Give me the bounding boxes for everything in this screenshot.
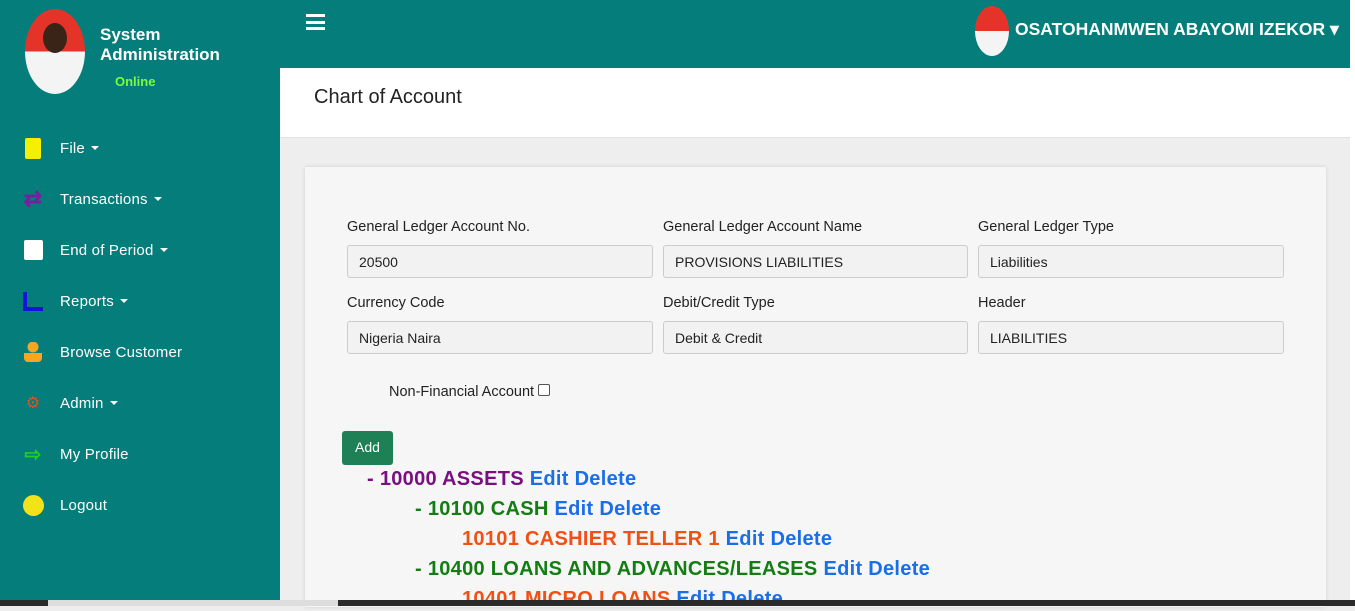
nav: logout: Logout [60, 496, 107, 514]
form card: General Ledger Type [978, 219, 1114, 235]
sidebar title: Administration [100, 45, 220, 64]
nav: browse customer: Browse Customer [60, 344, 182, 360]
page header [280, 68, 1350, 138]
account tree: - 10100 CASH Edit Delete [415, 498, 661, 520]
account tree: 10401 MICRO LOANS Edit Delete [462, 588, 783, 610]
add button: Add [355, 439, 380, 455]
account tree: 10101 CASHIER TELLER 1 Edit Delete [462, 528, 832, 550]
nav: browse customer [24, 342, 182, 362]
user name: OSATOHANMWEN ABAYOMI IZEKOR ▾ [1015, 19, 1339, 39]
form card: Header [978, 295, 1026, 311]
form card: Liabilities [990, 254, 1048, 270]
form card: 20500 [359, 254, 398, 270]
account tree: - 10400 LOANS AND ADVANCES/LEASES Edit Delete [415, 558, 930, 580]
nav: transactions: Transactions [60, 190, 148, 208]
sidebar title: System [100, 25, 160, 44]
nav: my profile: ⇨ [25, 444, 41, 466]
form card: LIABILITIES [990, 330, 1067, 346]
sidebar title [100, 25, 220, 64]
status online: Online [115, 74, 155, 89]
form card: General Ledger Account Name [663, 219, 862, 235]
user avatar [975, 6, 1009, 56]
top bar [280, 0, 1350, 68]
add button [342, 431, 393, 465]
nav: end of period: End of Period [60, 242, 154, 258]
nav: admin: Admin [60, 394, 104, 412]
nav: file [25, 138, 99, 159]
account tree [367, 468, 930, 610]
nav: my profile: My Profile [60, 446, 129, 462]
page title: Chart of Account [314, 86, 462, 108]
non-financial checkbox: Non-Financial Account [389, 384, 534, 400]
form card: PROVISIONS LIABILITIES [675, 254, 843, 270]
nav: admin [26, 394, 118, 412]
nav: transactions: ⇄ [24, 186, 42, 211]
avatar [25, 9, 85, 94]
account tree: - 10000 ASSETS Edit Delete [367, 468, 636, 490]
nav: transactions [24, 186, 162, 211]
nav: admin: ⚙ [26, 395, 40, 412]
form card: Debit/Credit Type [663, 295, 775, 311]
form card: Debit & Credit [675, 330, 762, 346]
form card: Currency Code [347, 295, 445, 311]
nav: reports [23, 292, 128, 311]
nav: end of period [24, 240, 168, 260]
hamburger icon [306, 14, 325, 30]
nav: my profile [24, 444, 129, 466]
nav: reports: Reports [60, 292, 114, 310]
bottom bar [0, 600, 1355, 606]
form card: Nigeria Naira [359, 330, 441, 346]
form card: General Ledger Account No. [347, 219, 530, 235]
nav: logout [23, 495, 107, 516]
form card [305, 167, 1326, 607]
nav: file: File [60, 140, 85, 156]
sidebar [0, 0, 280, 606]
